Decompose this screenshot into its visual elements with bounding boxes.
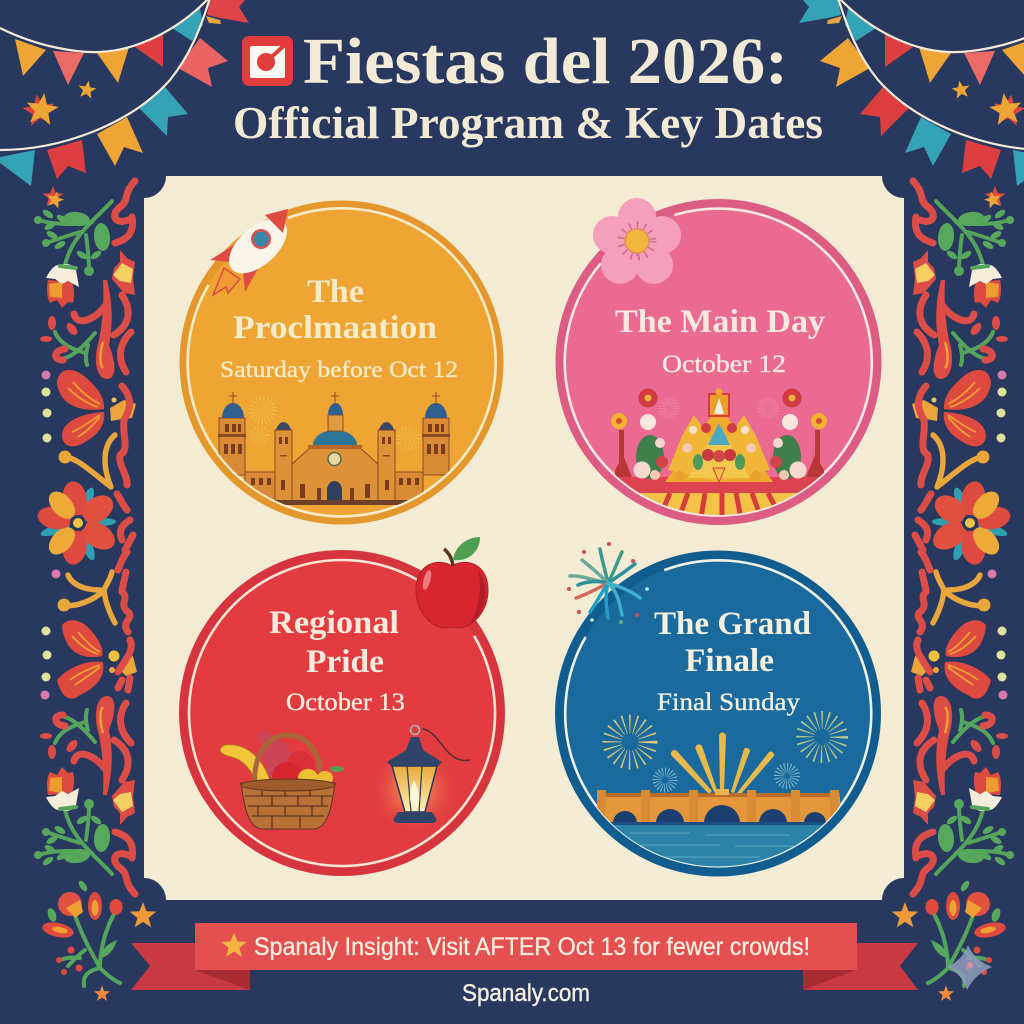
date: Saturday before Oct 12 [220, 357, 458, 382]
circle: The Grand Finale (blue) [550, 542, 890, 893]
star upper [43, 186, 66, 209]
icon: lantern [368, 726, 470, 836]
icon: star [221, 932, 247, 957]
heading: The [307, 274, 364, 310]
upper floral half [34, 181, 135, 379]
small star [94, 986, 110, 1001]
banner tail left [131, 943, 250, 990]
website footer: Spanaly.com [462, 980, 590, 1007]
illustration: cathedral [218, 392, 450, 505]
title line 2: Official Program & Key Dates [233, 98, 823, 148]
heading line 2: Pride [306, 644, 384, 680]
panel: cream background [144, 176, 904, 900]
date: October 12 [662, 351, 786, 378]
central flower [36, 480, 120, 566]
icon: rocket [210, 208, 297, 295]
icon: apple [416, 537, 488, 628]
callout banner [131, 923, 918, 990]
lower butterfly flower [57, 572, 137, 699]
icon: logo square [242, 36, 293, 86]
decorative dots [40, 370, 60, 700]
sparkle mark [947, 945, 992, 990]
icon: fireworks burst [567, 542, 649, 624]
banner tail right [803, 943, 918, 990]
circle: The Main Day (pink) [556, 198, 882, 525]
lower floral half [34, 696, 135, 894]
banner text: Spanaly Insight: Visit AFTER Oct 13 for fewer crowds! [254, 933, 810, 961]
icon: fruit basket [220, 730, 344, 829]
heading: Regional [269, 605, 399, 641]
banner body [195, 923, 857, 970]
title block [233, 25, 823, 148]
heading: The Main Day [615, 304, 826, 340]
circle: The Proclamation (orange) [180, 200, 504, 524]
illustration: altar [611, 388, 827, 515]
bunting: top left [0, 0, 249, 186]
star lower [130, 902, 156, 927]
heading line 2: Finale [685, 643, 774, 679]
illustration: bridge and fireworks [597, 711, 848, 866]
heading: The Grand [654, 606, 811, 642]
circle: Regional Pride (red) [179, 537, 505, 876]
date: October 13 [286, 689, 405, 716]
bunting: top right [799, 0, 1024, 186]
icon: pink flower [593, 198, 681, 284]
bouquet [41, 879, 122, 986]
date: Final Sunday [657, 689, 801, 716]
heading line 2: Proclmaation [233, 310, 437, 346]
upper butterfly flower [57, 370, 136, 487]
right floral border [892, 181, 1014, 1001]
left floral border [34, 181, 156, 1001]
title line 1: Fiestas del 2026: [303, 25, 788, 98]
